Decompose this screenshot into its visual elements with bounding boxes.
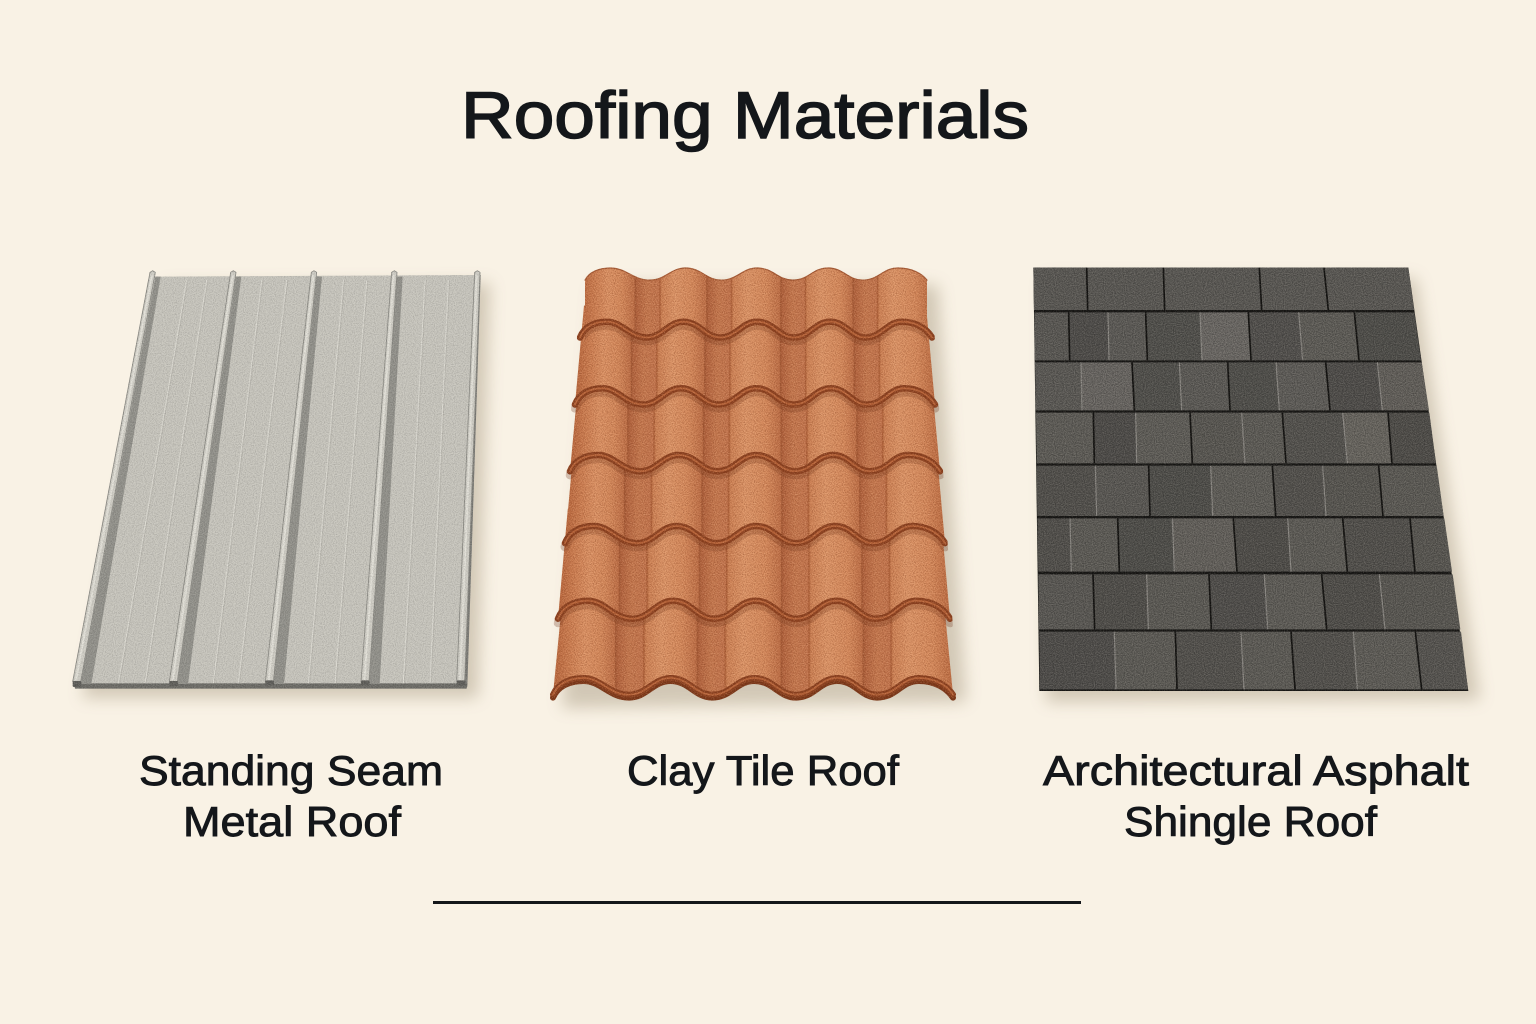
panel: architectural asphalt shingle roof <box>1033 268 1480 702</box>
label: standing seam metal roof <box>139 747 443 845</box>
panel: clay tile roof <box>553 241 966 708</box>
label: standing seam metal roof: Standing Seam <box>139 747 443 794</box>
shingles <box>1033 268 1468 691</box>
shingle shadow <box>1045 278 1480 702</box>
label: architectural asphalt shingle roof <box>1043 747 1469 845</box>
clay tile shadow <box>562 285 966 708</box>
panel: standing seam metal roof <box>73 271 490 698</box>
bottom rule <box>433 901 1081 904</box>
metal sheet <box>73 271 481 689</box>
label: architectural asphalt shingle roof: Architectural Asphalt <box>1043 747 1469 794</box>
metal sheet shadow <box>82 283 490 698</box>
label: architectural asphalt shingle roof: Shingle Roof <box>1124 798 1377 845</box>
title: Roofing Materials <box>461 78 1029 152</box>
label: standing seam metal roof: Metal Roof <box>183 798 401 845</box>
label: clay tile roof: Clay Tile Roof <box>627 747 899 794</box>
clay tiles <box>553 241 953 698</box>
